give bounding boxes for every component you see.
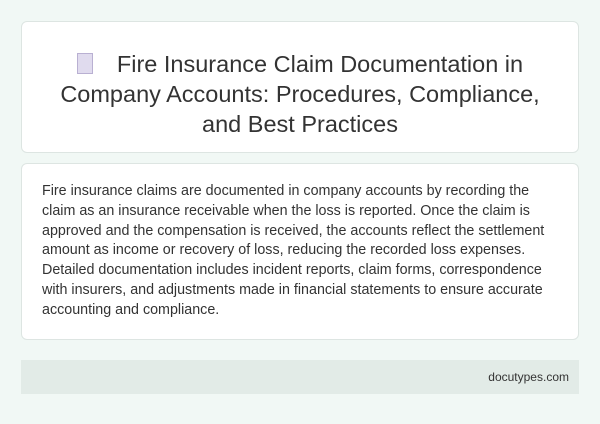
title xyxy=(60,51,540,137)
text block: approved and the compensation is received, the accounts reflect the settlement xyxy=(42,223,544,239)
icon: document xyxy=(77,53,93,74)
text block xyxy=(42,183,544,318)
description panel xyxy=(21,163,579,340)
footer xyxy=(21,360,579,394)
text block: Detailed documentation includes incident reports, claim forms, correspondence xyxy=(42,262,542,278)
title panel xyxy=(21,21,579,153)
title: and Best Practices xyxy=(202,111,398,137)
text block: amount as income or recovery of loss, reducing the recorded loss expenses. xyxy=(42,242,525,258)
title: Fire Insurance Claim Documentation in xyxy=(117,51,523,77)
text block: accounting and compliance. xyxy=(42,302,219,318)
title: Company Accounts: Procedures, Compliance, xyxy=(60,81,540,107)
footer: docutypes.com xyxy=(488,370,569,384)
text block: with insurers, and adjustments made in financial statements to ensure accurate xyxy=(42,282,543,298)
text block: Fire insurance claims are documented in company accounts by recording the xyxy=(42,183,529,199)
text block: claim as an insurance receivable when the loss is reported. Once the claim is xyxy=(42,203,530,219)
